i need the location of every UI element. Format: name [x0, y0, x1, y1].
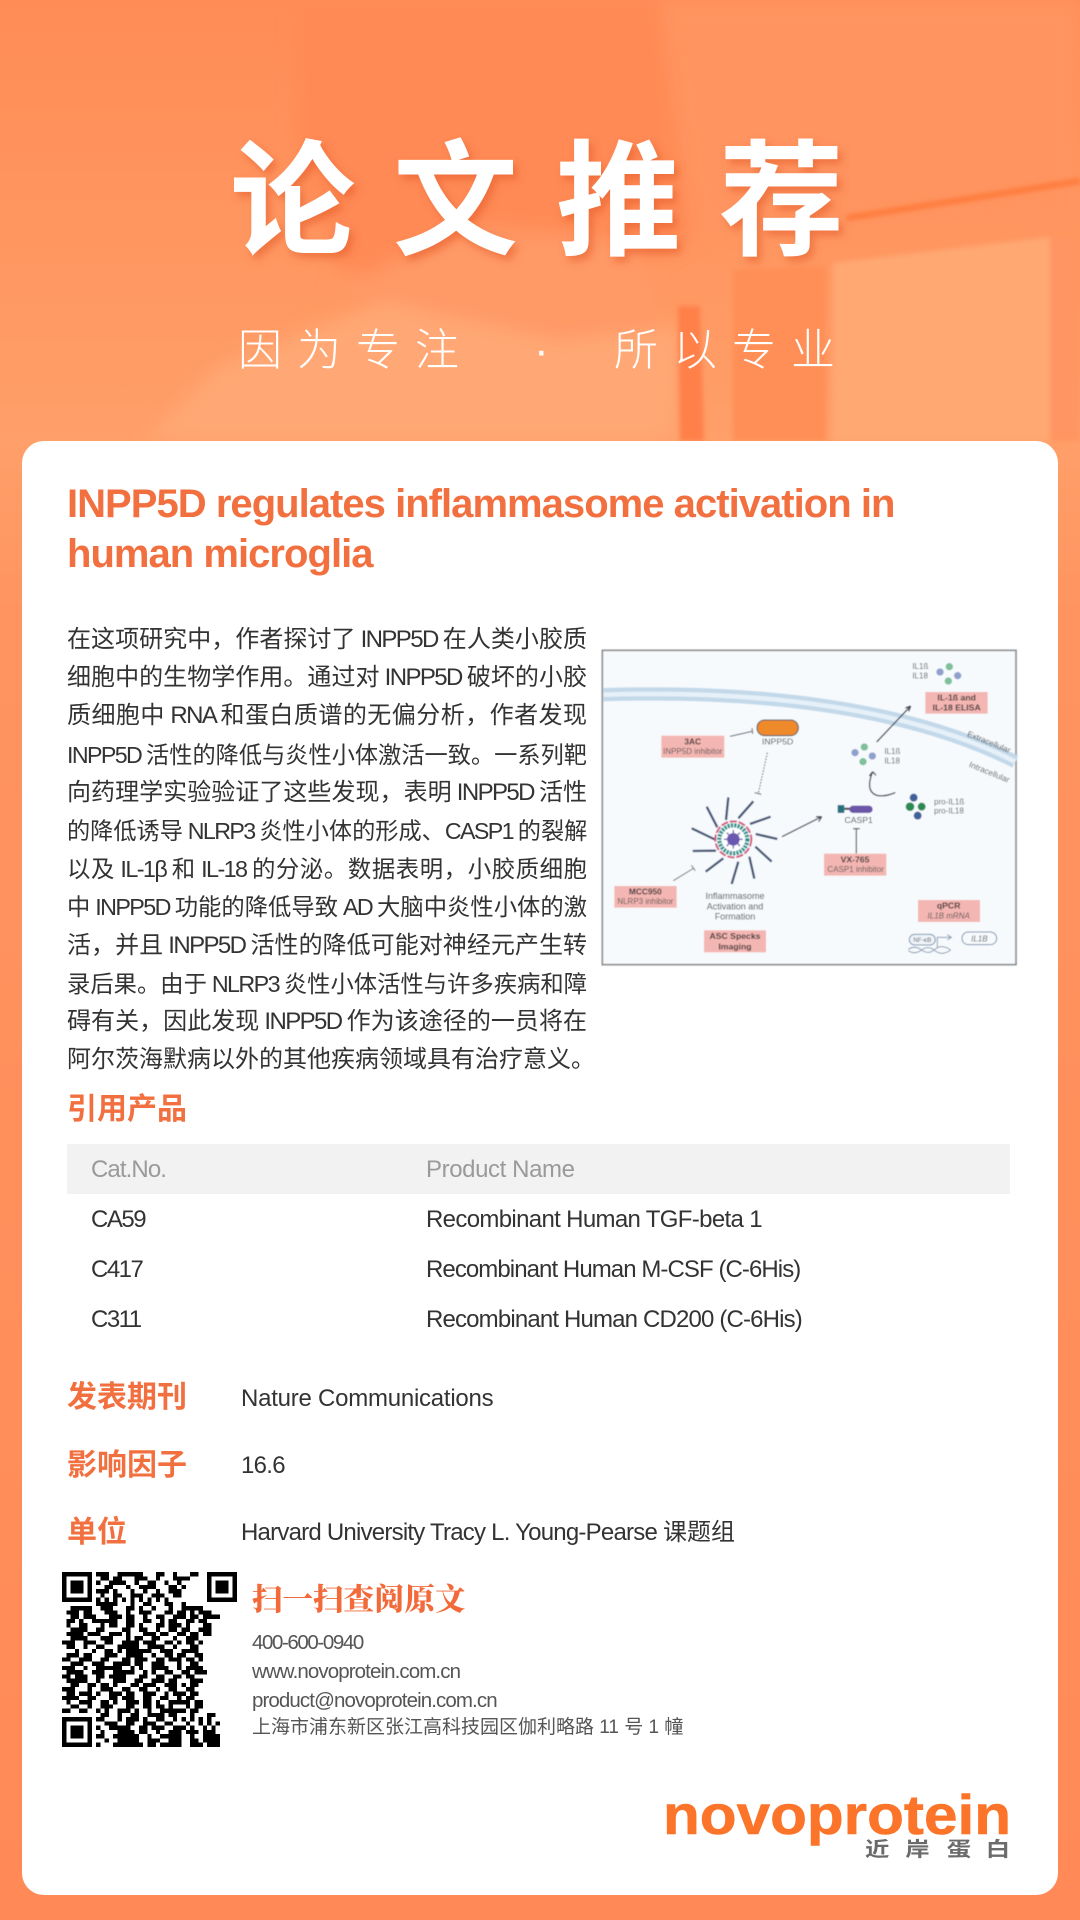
label: ASC specks imaging — [704, 930, 766, 952]
label: intracellular: Intracellular — [968, 759, 1011, 785]
text block: abstract: 向药理学实验验证了这些发现，表明 INPP5D 活性 — [67, 779, 587, 806]
icon: secreted IL cluster — [912, 662, 961, 685]
panel: main card — [22, 441, 1058, 1895]
chart: inflammasome pathway figure — [600, 648, 1018, 966]
label: ELISA: IL-18 ELISA — [933, 703, 981, 713]
label: extracellular: Extracellular — [966, 729, 1012, 755]
icon: NF-kB and IL1B gene: NF-κB — [913, 937, 931, 944]
label: VX-765 — [824, 829, 886, 876]
text block: abstract: 阿尔茨海默病以外的其他疾病领域具有治疗意义。 — [67, 1046, 595, 1073]
text block: abstract: 质细胞中 RNA 和蛋白质谱的无偏分析，作者发现 — [67, 702, 587, 729]
text block: abstract: 录后果。由于 NLRP3 炎性小体活性与许多疾病和障 — [67, 971, 587, 997]
label: ASC specks imaging: ASC Specks — [710, 931, 761, 941]
arrow: inflammasome to CASP1 — [782, 817, 822, 837]
text block: abstract: 在这项研究中，作者探讨了 INPP5D 在人类小胶质 — [67, 626, 587, 653]
impact factor row: 16.6 — [241, 1452, 285, 1479]
contact details: product@novoprotein.com.cn — [252, 1689, 497, 1712]
label: ELISA: IL-1ß and — [937, 692, 976, 702]
table row C311: Recombinant Human CD200 (C-6His) — [426, 1306, 802, 1333]
contact details: 400-600-0940 — [252, 1631, 363, 1654]
label: qPCR: IL1B mRNA — [928, 911, 970, 920]
heading: paper title — [67, 482, 894, 576]
label: inflammasome activation: Formation — [715, 912, 755, 922]
table header: Cat.No. — [91, 1156, 166, 1183]
title: 论文推荐 — [230, 133, 882, 272]
affiliation row — [67, 1516, 735, 1549]
text block: abstract: INPP5D 活性的降低与炎性小体激活一致。一系列靶 — [67, 742, 587, 768]
label: ELISA — [925, 692, 988, 714]
logo: novoprotein: novoprotein — [663, 1783, 1011, 1846]
table header — [67, 1144, 1010, 1194]
impact factor row — [67, 1449, 285, 1482]
icon: NF-kB and IL1B gene — [908, 932, 997, 953]
text block: abstract: 的降低诱导 NLRP3 炎性小体的形成、CASP1 的裂解 — [67, 818, 587, 844]
affiliation row: Harvard University Tracy L. Young-Pearse 课题组 — [241, 1519, 735, 1546]
label: 3AC: INPP5D inhibitor — [663, 747, 723, 756]
affiliation row: 单位 — [67, 1516, 127, 1549]
table row C417 — [91, 1256, 800, 1283]
contact details: www.novoprotein.com.cn — [252, 1660, 460, 1683]
QR code — [62, 1572, 237, 1747]
table row C311: C311 — [91, 1306, 141, 1333]
logo: novoprotein: 近岸蛋白 — [865, 1838, 1010, 1860]
text block: abstract: 中 INPP5D 功能的降低导致 AD 大脑中炎性小体的激 — [67, 894, 587, 920]
icon: pro-IL cluster: pro-IL18 — [934, 806, 964, 815]
table: products — [67, 1144, 1010, 1333]
table row C417: Recombinant Human M-CSF (C-6His) — [426, 1256, 800, 1283]
label: ASC specks imaging: Imaging — [718, 942, 752, 952]
icon: INPP5D — [757, 720, 798, 746]
label: 3AC: 3AC — [684, 736, 701, 746]
icon: INPP5D: INPP5D — [762, 736, 793, 746]
table row CA59: CA59 — [91, 1206, 145, 1233]
icon: inflammasome — [692, 797, 777, 884]
subtitle: · — [534, 326, 549, 375]
label: qPCR — [918, 900, 980, 922]
label: qPCR: qPCR — [937, 901, 961, 911]
icon: secreted IL cluster: IL1ß — [912, 662, 928, 671]
label: 3AC — [661, 736, 724, 758]
label: inflammasome activation: Activation and — [707, 901, 763, 911]
label: inflammasome activation: Inflammasome — [705, 891, 765, 901]
heading: scan to read: 扫一扫查阅原文 — [252, 1575, 466, 1619]
heading: paper title: human microglia — [67, 532, 373, 576]
icon: CASP1: CASP1 — [844, 815, 873, 825]
text block: abstract: 碍有关，因此发现 INPP5D 作为该途径的一员将在 — [67, 1008, 587, 1035]
label: inflammasome activation — [705, 891, 765, 922]
table row CA59 — [91, 1206, 762, 1233]
icon: NF-kB and IL1B gene: IL1B — [971, 934, 988, 943]
icon: IL cluster — [851, 743, 900, 765]
icon: IL cluster: IL1ß — [884, 747, 900, 756]
icon: pro-IL cluster — [906, 794, 964, 820]
table row C417: C417 — [91, 1256, 142, 1283]
journal row: Nature Communications — [241, 1385, 493, 1412]
heading: paper title: INPP5D regulates inflammasome activation in — [67, 482, 894, 526]
impact factor row: 影响因子 — [67, 1449, 187, 1482]
label: MCC950: NLRP3 inhibitor — [617, 897, 674, 906]
icon: secreted IL cluster: IL18 — [912, 672, 928, 681]
journal row — [67, 1381, 493, 1414]
heading: cited products: 引用产品 — [67, 1093, 187, 1126]
text block: abstract: 活，并且 INPP5D 活性的降低可能对神经元产生转 — [67, 932, 587, 959]
journal row: 发表期刊 — [67, 1381, 187, 1414]
text block: abstract: 以及 IL-1β 和 IL-18 的分泌。数据表明，小胶质细胞 — [67, 856, 587, 882]
label: VX-765: CASP1 inhibitor — [827, 865, 884, 874]
table row CA59: Recombinant Human TGF-beta 1 — [426, 1206, 762, 1233]
table header: Product Name — [426, 1156, 575, 1183]
subtitle — [238, 326, 850, 375]
icon: pro-IL cluster: pro-IL1ß — [934, 797, 964, 806]
subtitle: 所以专业 — [614, 326, 850, 375]
text block: abstract — [67, 626, 595, 1073]
icon: CASP1 — [838, 805, 873, 825]
subtitle: 因为专注 — [238, 326, 474, 375]
icon: IL cluster: IL18 — [884, 756, 900, 765]
label: VX-765: VX-765 — [841, 854, 870, 864]
table row C311 — [91, 1306, 802, 1333]
text block: abstract: 细胞中的生物学作用。通过对 INPP5D 破坏的小胶 — [67, 664, 587, 691]
arrow: secretion — [877, 706, 911, 742]
arrow: pro-IL to IL — [869, 772, 895, 796]
contact details: 上海市浦东新区张江高科技园区伽利略路 11 号 1 幢 — [252, 1717, 683, 1738]
label: MCC950: MCC950 — [629, 886, 662, 896]
contact details — [252, 1631, 683, 1738]
label: MCC950 — [614, 865, 695, 908]
